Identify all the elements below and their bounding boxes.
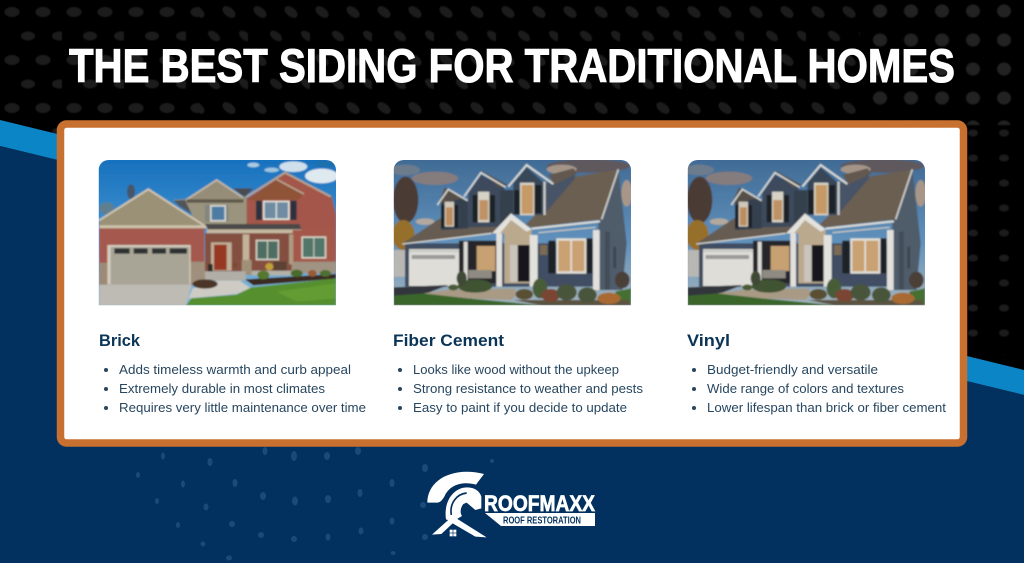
list: vinyl points: Lower lifespan than brick or fiber cement: [707, 400, 946, 415]
wordmark: ROOFMAXX: [484, 491, 595, 516]
banner: roof restoration: ROOF RESTORATION: [503, 516, 581, 526]
column: vinyl: [687, 331, 946, 415]
photo: fiber cement house: [390, 158, 633, 307]
heading: brick: Brick: [99, 331, 141, 350]
column: fiber cement: [393, 331, 644, 415]
column: brick: [99, 331, 366, 415]
list: brick points: Extremely durable in most climates: [119, 381, 326, 396]
list: brick points: Requires very little maintenance over time: [119, 400, 366, 415]
photo: vinyl house: [684, 158, 927, 307]
list: vinyl points: Wide range of colors and textures: [707, 381, 904, 396]
list: brick points: Adds timeless warmth and curb appeal: [119, 362, 351, 377]
list: fiber cement points: Strong resistance to weather and pests: [413, 381, 644, 396]
list: vinyl points: Budget-friendly and versatile: [707, 362, 878, 377]
banner: roof restoration: [485, 513, 595, 526]
list: fiber cement points: Easy to paint if you decide to update: [413, 400, 627, 415]
list: vinyl points: [692, 362, 946, 415]
heading: fiber cement: Fiber Cement: [393, 331, 504, 350]
icon: spartan helmet and roof: [427, 472, 487, 537]
list: fiber cement points: [398, 362, 644, 415]
heading: vinyl: Vinyl: [687, 331, 730, 350]
panel: siding card: [60, 124, 964, 443]
list: brick points: [104, 362, 366, 415]
photo: brick house: [97, 158, 338, 307]
list: fiber cement points: Looks like wood without the upkeep: [413, 362, 619, 377]
logo: roofmaxx: [427, 472, 595, 537]
